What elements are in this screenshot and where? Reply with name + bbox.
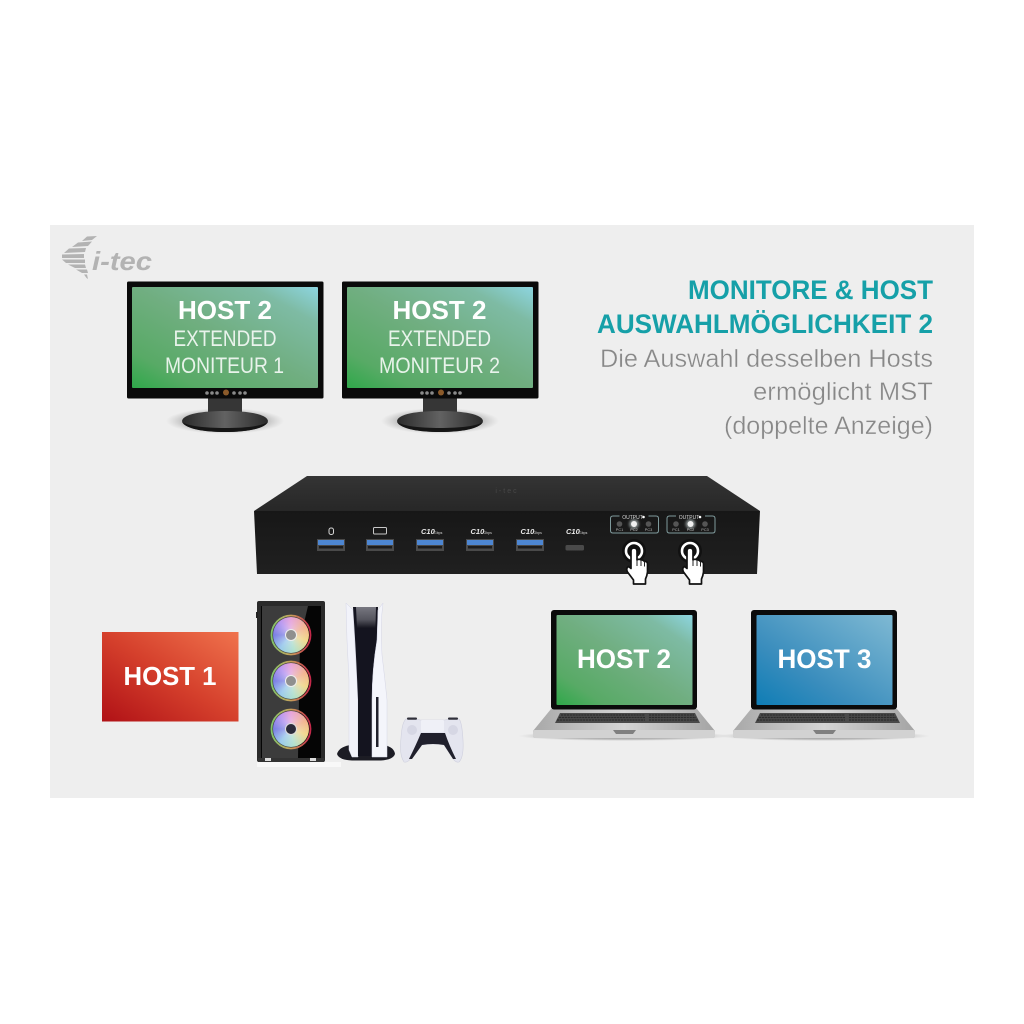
console left shell — [346, 603, 358, 757]
disc slot — [376, 697, 378, 747]
description text: (doppelte Anzeige) — [724, 412, 933, 440]
laptop label host 2: HOST 2 — [577, 644, 671, 674]
top logo: i-tec — [495, 488, 519, 495]
port labels: 10 Gbps — [421, 527, 588, 536]
device top — [254, 476, 760, 511]
monitor 2 label: MONITEUR 2 — [379, 353, 500, 378]
laptop host 2 — [518, 610, 730, 741]
laptop screen host 2 — [556, 615, 692, 705]
monitor 1 label: HOST 2 — [178, 295, 272, 325]
port icon: keyboard — [374, 528, 386, 534]
monitor 1 label: EXTENDED — [174, 326, 276, 351]
monitor 2 — [342, 282, 538, 434]
USB-A ports — [317, 539, 544, 551]
laptop label host 3: HOST 3 — [778, 644, 872, 674]
heading: AUSWAHLMÖGLICHKEIT 2 — [597, 309, 933, 339]
port icon: mouse — [329, 528, 334, 534]
laptop screen host 3 — [756, 615, 892, 705]
fan 3 — [272, 710, 310, 748]
description text: ermöglicht MST — [753, 378, 933, 406]
fan 1 — [272, 616, 310, 654]
docking station device — [254, 476, 760, 574]
game console — [337, 603, 463, 762]
host 1 label box: HOST 1 — [124, 661, 216, 691]
heading — [597, 275, 933, 339]
screen 2 — [347, 287, 533, 388]
output selector 1 — [610, 515, 658, 533]
logo wordmark: i-tec — [92, 246, 153, 276]
monitor 1 label: MONITEUR 1 — [165, 353, 284, 378]
icon: touch hand 1 — [622, 539, 648, 584]
monitor 1 — [127, 282, 324, 434]
game controller — [400, 718, 463, 762]
monitor 2 label: EXTENDED — [388, 326, 491, 351]
console core — [353, 607, 378, 756]
laptop host 3 — [718, 610, 930, 741]
screen 1 — [132, 287, 318, 388]
USB-C port — [566, 545, 584, 550]
console top highlight — [356, 607, 376, 628]
console right shell — [372, 603, 387, 757]
monitor 2 label — [379, 295, 500, 378]
device front — [254, 511, 760, 574]
fan 2 — [272, 662, 310, 700]
icon: touch hand 2 — [678, 539, 704, 584]
PC tower — [256, 601, 341, 767]
output selector 2 — [667, 515, 715, 533]
monitor 2 label: HOST 2 — [392, 295, 486, 325]
icon: logo stripes — [62, 236, 97, 279]
monitor 1 label — [165, 295, 284, 378]
heading: MONITORE & HOST — [688, 275, 933, 305]
description text: Die Auswahl desselben Hosts — [600, 345, 933, 373]
description text — [600, 345, 933, 440]
host 1 label box — [102, 632, 238, 722]
logo: i-tec — [62, 236, 153, 279]
console base — [337, 745, 395, 760]
background panel — [50, 225, 974, 798]
